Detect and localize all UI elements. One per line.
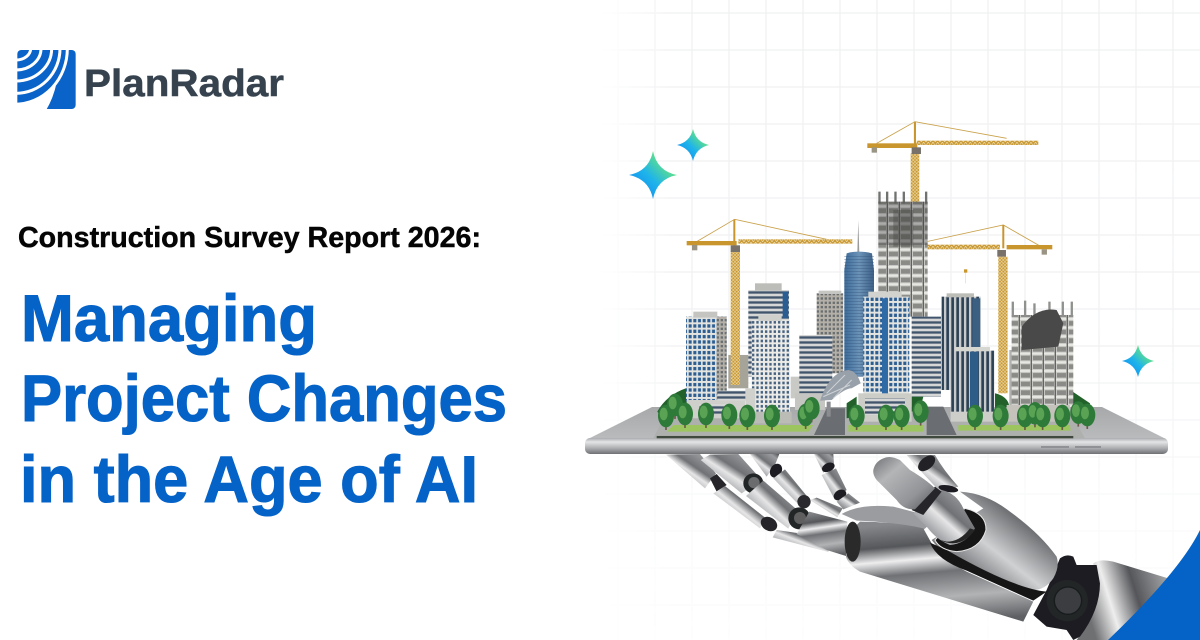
dark tower: [942, 293, 981, 390]
blue corner shape: [1108, 530, 1200, 640]
left back tower: [748, 283, 789, 377]
arch bridge: [820, 370, 861, 417]
title: Project Changes: [21, 361, 507, 435]
left tower: [686, 312, 746, 418]
finger four: [814, 454, 860, 509]
left front tower: [745, 315, 792, 423]
glass antenna tower: [844, 220, 874, 377]
icon: large sparkle: [629, 151, 677, 199]
right front tower: [951, 347, 994, 422]
tablet edge: [585, 438, 1168, 454]
crane: top centre: [867, 122, 1038, 203]
PlanRadar logo: [15, 49, 284, 112]
grey tower: [817, 291, 843, 373]
mid strip tower: [912, 317, 941, 397]
lower arm: [846, 522, 1033, 622]
crane: left: [687, 219, 852, 385]
hedges: [657, 388, 1090, 420]
icon: right sparkle: [1122, 345, 1154, 377]
miniature city: [653, 122, 1095, 438]
finger two: [701, 454, 847, 556]
centre tower: [858, 292, 912, 422]
crane: right: [893, 225, 1052, 393]
trees: [658, 394, 1095, 430]
low strip building: [791, 335, 832, 410]
palm top: [842, 506, 937, 530]
title: in the Age of AI: [20, 442, 478, 516]
unfinished right tower: [1007, 301, 1073, 422]
wrist joint: [1033, 555, 1100, 640]
finger three: [750, 454, 843, 517]
wordmark: PlanRadar: [84, 63, 284, 105]
subtitle: Construction Survey Report 2026:: [18, 222, 481, 254]
tablet: [585, 407, 1168, 454]
wrist opening: [845, 522, 861, 562]
low block behind left tower: [728, 355, 748, 388]
title: [20, 281, 507, 516]
robot hand: [666, 452, 1200, 640]
thumb: [873, 452, 975, 545]
thumb opening: [935, 508, 986, 552]
arm gap shadow: [930, 543, 1047, 601]
finger one: [666, 454, 830, 552]
ground plate: [653, 407, 1085, 438]
title: Managing: [21, 281, 317, 355]
unfinished tall tower: [878, 192, 928, 317]
back of hand: [932, 492, 1058, 590]
forearm: [1077, 560, 1200, 640]
tablet top surface: [588, 407, 1166, 439]
icon: small sparkle: [677, 129, 709, 161]
icon: radar mark: [15, 49, 76, 112]
background grid: [638, 0, 1200, 460]
